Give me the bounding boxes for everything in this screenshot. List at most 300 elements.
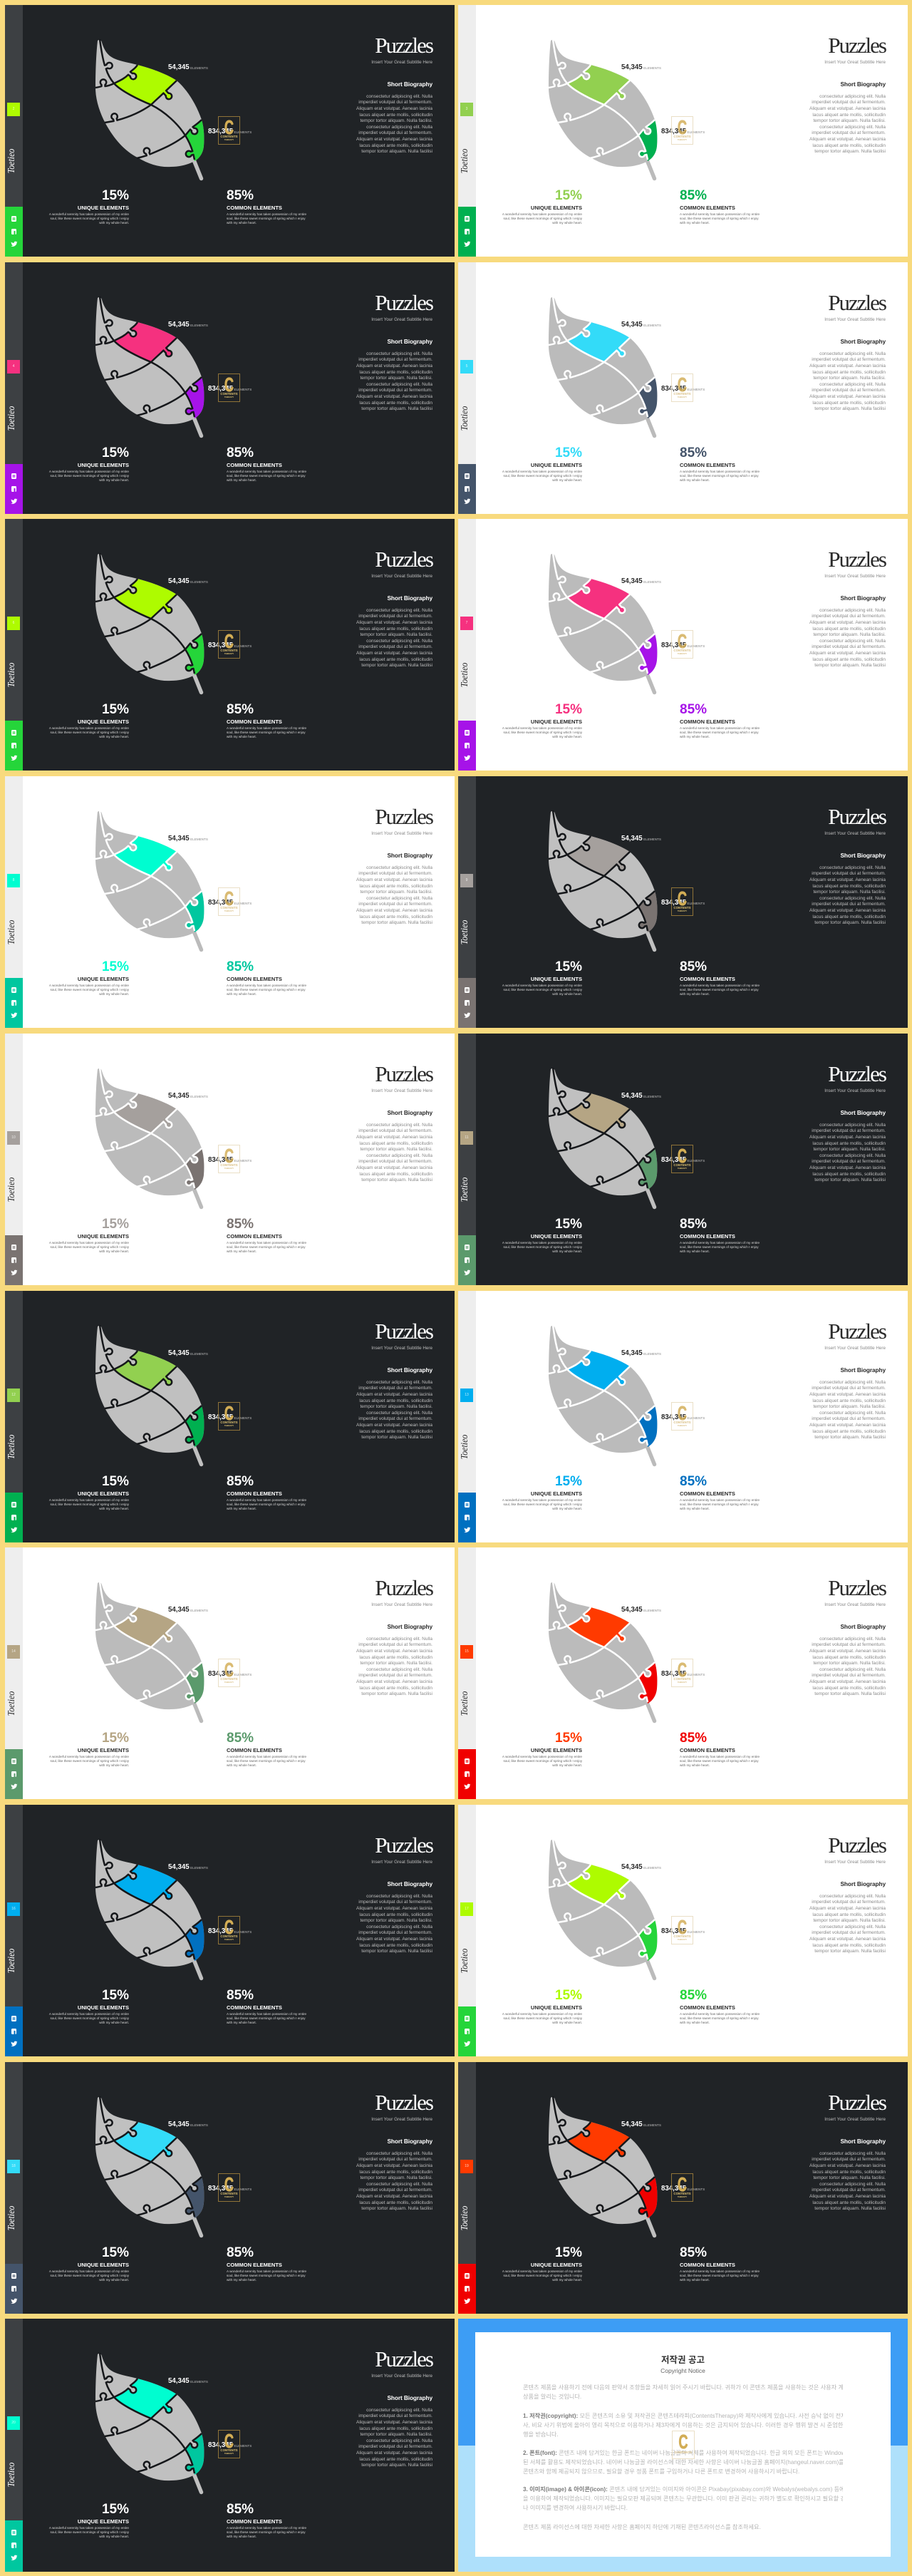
watermark logo: THERAPY <box>678 910 687 912</box>
stat text <box>227 984 306 997</box>
watermark logo: THERAPY <box>678 1167 687 1170</box>
stat text <box>502 1755 582 1768</box>
biography: Aliquam erat volutpat. Aenean lacinia <box>356 1135 432 1140</box>
stat text <box>502 470 582 482</box>
stat text: A wonderful serenity has taken possession of my entire <box>49 2270 129 2273</box>
biography: Aliquam erat volutpat. Aenean lacinia <box>809 137 886 142</box>
stat text: with my whole heart. <box>99 735 129 738</box>
stat 85%: 85% <box>227 1731 254 1746</box>
biography: imperdiet volutpat dui at fermentum. <box>812 1673 886 1678</box>
biography: consectetur adipiscing elit. Nulla <box>819 896 886 901</box>
biography: Aliquam erat volutpat. Aenean lacinia <box>809 620 886 625</box>
stat 85%: 85% <box>227 188 254 203</box>
biography: consectetur adipiscing elit. Nulla <box>366 1925 432 1930</box>
watermark logo <box>218 2430 240 2458</box>
biography: Aliquam erat volutpat. Aenean lacinia <box>356 2194 432 2199</box>
biography: lacus aliquet ante mollis, sollicitudin <box>359 1141 432 1146</box>
biography: Aliquam erat volutpat. Aenean lacinia <box>809 106 886 111</box>
watermark logo: THERAPY <box>678 1424 687 1427</box>
stat text: A wonderful serenity has taken possession of my entire <box>227 726 306 730</box>
stat label: UNIQUE ELEMENTS <box>78 2004 129 2011</box>
stat text: soul, like these sweet mornings of spring which I enjoy <box>50 2016 129 2020</box>
watermark logo <box>218 1402 240 1431</box>
stat text: with my whole heart. <box>99 1250 129 1253</box>
stat 15%: 15% <box>102 2502 129 2517</box>
stat text: soul, like these sweet mornings of spring which I enjoy <box>227 731 306 734</box>
sidebar <box>5 5 23 257</box>
stat text: A wonderful serenity has taken possession of my entire <box>227 2012 306 2016</box>
biography: imperdiet volutpat dui at fermentum. <box>812 1416 886 1421</box>
panel: slide 3 light green <box>458 5 908 257</box>
biography: tempor tortor aliquam. Nulla facilisi. <box>360 890 432 895</box>
watermark logo: C <box>678 116 687 138</box>
social icons <box>5 464 23 514</box>
brand: Toetieo <box>460 1949 470 1973</box>
subtitle: Insert Your Great Subtitle Here <box>371 2374 432 2379</box>
stat text <box>227 2526 306 2540</box>
stat label: COMMON ELEMENTS <box>227 2262 282 2268</box>
subtitle: Insert Your Great Subtitle Here <box>824 574 886 579</box>
biography: imperdiet volutpat dui at fermentum. <box>812 1930 886 1935</box>
biography: lacus aliquet ante mollis, sollicitudin <box>359 1429 432 1434</box>
heading: Short Biography <box>841 1623 886 1630</box>
sidebar <box>458 519 476 771</box>
brand: Toetieo <box>6 1949 17 1973</box>
sidebar <box>5 2062 23 2314</box>
page number <box>7 617 20 630</box>
page number <box>460 103 473 116</box>
stat text: with my whole heart. <box>680 992 710 996</box>
biography: Aliquam erat volutpat. Aenean lacinia <box>809 364 886 369</box>
watermark logo: THERAPY <box>224 2195 234 2198</box>
biography: lacus aliquet ante mollis, sollicitudin <box>359 2426 432 2431</box>
biography: tempor tortor aliquam. Nulla facilisi. <box>360 1918 432 1923</box>
title: Puzzles <box>375 33 432 58</box>
biography: Aliquam erat volutpat. Aenean lacinia <box>356 1679 432 1684</box>
stat text <box>48 726 129 738</box>
stat text <box>49 2270 129 2283</box>
biography: consectetur adipiscing elit. Nulla <box>366 639 432 644</box>
stat text: A wonderful serenity has taken possession of my entire <box>49 1241 129 1245</box>
biography: imperdiet volutpat dui at fermentum. <box>358 1128 432 1133</box>
page number: 5 <box>466 364 467 369</box>
biography <box>809 2151 886 2212</box>
sidebar <box>458 1547 476 1799</box>
stat text: A wonderful serenity has taken possession of my entire <box>680 212 760 216</box>
brand: Toetieo <box>460 406 470 431</box>
biography: imperdiet volutpat dui at fermentum. <box>812 100 886 105</box>
sidebar <box>458 776 476 1028</box>
page number: 19 <box>465 2164 469 2168</box>
stat text: with my whole heart. <box>552 1763 582 1767</box>
biography: Aliquam erat volutpat. Aenean lacinia <box>356 1649 432 1654</box>
biography: lacus aliquet ante mollis, sollicitudin <box>359 915 432 919</box>
biography: imperdiet volutpat dui at fermentum. <box>812 644 886 649</box>
leaf puzzle <box>5 1805 455 2056</box>
panel: slide 19 dark red <box>458 2062 908 2314</box>
heading: Short Biography <box>388 852 432 859</box>
biography: tempor tortor aliquam. Nulla facilisi <box>814 1949 886 1954</box>
biography: tempor tortor aliquam. Nulla facilisi <box>814 920 886 925</box>
watermark logo: C <box>224 1659 234 1681</box>
stat text: A wonderful serenity has taken possession of my entire <box>680 470 760 473</box>
watermark logo: THERAPY <box>224 138 234 141</box>
biography <box>356 1123 432 1184</box>
biography: consectetur adipiscing elit. Nulla <box>819 94 886 99</box>
stat text: with my whole heart. <box>680 1507 710 1510</box>
stat 15%: 15% <box>555 1217 582 1232</box>
stat text <box>502 984 582 997</box>
value 1: 54,345 ELEMENTS <box>621 1349 661 1357</box>
page number: 10 <box>11 1135 16 1140</box>
biography: consectetur adipiscing elit. Nulla <box>819 1667 886 1672</box>
stat 15%: 15% <box>102 959 129 974</box>
stat 85%: 85% <box>227 445 254 460</box>
stat text: soul, like these sweet mornings of spring which I enjoy <box>503 2016 582 2020</box>
watermark logo: THERAPY <box>224 2452 234 2455</box>
biography <box>809 94 886 154</box>
biography: Aliquam erat volutpat. Aenean lacinia <box>809 651 886 656</box>
brand: Toetieo <box>460 920 470 944</box>
biography: tempor tortor aliquam. Nulla facilisi. <box>813 2175 886 2180</box>
title: Puzzles <box>828 547 886 572</box>
biography: lacus aliquet ante mollis, sollicitudin <box>359 1943 432 1948</box>
stat text: with my whole heart. <box>227 2278 256 2282</box>
value 1: 54,345 ELEMENTS <box>168 63 208 71</box>
value 2: 834,345 ELEMENTS <box>661 2185 705 2193</box>
biography: imperdiet volutpat dui at fermentum. <box>358 614 432 619</box>
watermark logo: C <box>224 373 234 396</box>
value 1: 54,345 ELEMENTS <box>168 2121 208 2128</box>
watermark logo: CONTENTS <box>673 1163 691 1167</box>
stat text: with my whole heart. <box>227 1250 256 1253</box>
stat text: A wonderful serenity has taken possession of my entire <box>502 1755 582 1758</box>
biography: consectetur adipiscing elit. Nulla <box>819 2182 886 2187</box>
biography: Aliquam erat volutpat. Aenean lacinia <box>356 620 432 625</box>
biography: Aliquam erat volutpat. Aenean lacinia <box>356 2451 432 2456</box>
stat label: COMMON ELEMENTS <box>227 718 282 725</box>
heading: Short Biography <box>841 1366 886 1374</box>
biography: lacus aliquet ante mollis, sollicitudin <box>812 113 886 118</box>
watermark logo <box>671 630 693 659</box>
biography: Aliquam erat volutpat. Aenean lacinia <box>809 1679 886 1684</box>
stat text: soul, like these sweet mornings of spring which I enjoy <box>503 217 582 220</box>
stat text: with my whole heart. <box>99 992 129 996</box>
watermark logo <box>671 1145 693 1173</box>
leaf puzzle <box>95 39 204 181</box>
biography: Aliquam erat volutpat. Aenean lacinia <box>356 2163 432 2168</box>
brand: Toetieo <box>6 663 17 687</box>
watermark logo: CONTENTS <box>220 649 238 652</box>
subtitle: Insert Your Great Subtitle Here <box>371 574 432 579</box>
value 2: 834,345 ELEMENTS <box>208 1413 252 1421</box>
stat 15%: 15% <box>555 445 582 460</box>
biography: tempor tortor aliquam. Nulla facilisi <box>361 663 432 668</box>
panel: slide 7 light pink <box>458 519 908 771</box>
stat text: A wonderful serenity has taken possession of my entire <box>227 2270 306 2273</box>
heading: Short Biography <box>388 1109 432 1116</box>
biography: Aliquam erat volutpat. Aenean lacinia <box>809 2194 886 2199</box>
white card <box>475 2332 891 2557</box>
stat text: soul, like these sweet mornings of spring which I enjoy <box>50 1245 129 1249</box>
biography: consectetur adipiscing elit. Nulla <box>819 1637 886 1642</box>
social icons <box>458 1235 476 1285</box>
stat text <box>49 1498 129 1512</box>
watermark logo: THERAPY <box>678 2195 687 2198</box>
title: Puzzles <box>375 804 432 829</box>
stat text <box>502 2012 582 2026</box>
social icons <box>5 2264 23 2314</box>
watermark logo: C <box>224 1402 234 1424</box>
page number: 12 <box>11 1393 16 1397</box>
biography: Aliquam erat volutpat. Aenean lacinia <box>356 2420 432 2425</box>
heading: Short Biography <box>388 594 432 602</box>
stat text: A wonderful serenity has taken possession of my entire <box>49 2526 129 2530</box>
stat label: COMMON ELEMENTS <box>227 462 282 468</box>
watermark logo: C <box>224 2173 234 2195</box>
panel: slide 13 light blue <box>458 1291 908 1542</box>
sidebar <box>5 519 23 771</box>
stat label: UNIQUE ELEMENTS <box>531 1490 582 1497</box>
stat 15%: 15% <box>102 188 129 203</box>
page number: 18 <box>11 2164 16 2168</box>
stat text: soul, like these sweet mornings of spring which I enjoy <box>227 1245 306 1249</box>
stat text <box>49 1241 129 1254</box>
stat label: COMMON ELEMENTS <box>680 2004 735 2011</box>
watermark logo: C <box>678 1145 687 1167</box>
stat text: soul, like these sweet mornings of spring which I enjoy <box>680 988 759 991</box>
page number: 14 <box>11 1649 16 1654</box>
social icons <box>458 464 476 514</box>
value 2: 834,345 ELEMENTS <box>208 642 252 649</box>
biography: consectetur adipiscing elit. Nulla <box>366 2182 432 2187</box>
stat text: A wonderful serenity has taken possession of my entire <box>227 1755 306 1758</box>
brand: Toetieo <box>6 2463 17 2487</box>
stat text <box>680 470 760 482</box>
stat label: UNIQUE ELEMENTS <box>78 1747 129 1753</box>
biography: lacus aliquet ante mollis, sollicitudin <box>359 113 432 118</box>
biography: imperdiet volutpat dui at fermentum. <box>358 1900 432 1905</box>
watermark logo: C <box>224 1145 234 1167</box>
stat 85%: 85% <box>227 1988 254 2003</box>
page number <box>460 874 473 887</box>
biography: tempor tortor aliquam. Nulla facilisi. <box>813 890 886 895</box>
watermark logo <box>218 373 240 402</box>
value 1: 54,345 ELEMENTS <box>621 1606 661 1614</box>
stat label: UNIQUE ELEMENTS <box>531 462 582 468</box>
sidebar <box>458 2062 476 2314</box>
stat 85%: 85% <box>227 959 254 974</box>
biography: imperdiet volutpat dui at fermentum. <box>812 614 886 619</box>
watermark logo: CONTENTS <box>673 906 691 910</box>
biography: consectetur adipiscing elit. Nulla <box>366 1380 432 1385</box>
stat text: with my whole heart. <box>227 992 256 996</box>
biography <box>809 1637 886 1698</box>
stat text: with my whole heart. <box>99 2535 129 2538</box>
stat label: UNIQUE ELEMENTS <box>531 205 582 211</box>
stat text <box>227 470 306 482</box>
social icons <box>458 721 476 771</box>
stat label: UNIQUE ELEMENTS <box>531 2262 582 2268</box>
watermark logo: CONTENTS <box>673 392 691 396</box>
biography: tempor tortor aliquam. Nulla facilisi <box>814 1435 886 1440</box>
stat text <box>49 2526 129 2540</box>
biography: tempor tortor aliquam. Nulla facilisi. <box>360 2432 432 2437</box>
intro text: 상품을 알리는 것입니다. <box>523 2394 581 2400</box>
biography <box>356 351 432 411</box>
panel: slide 2 dark lime <box>5 5 455 257</box>
biography <box>809 1123 886 1184</box>
biography <box>356 94 432 154</box>
social icons <box>458 1749 476 1799</box>
sidebar <box>5 1291 23 1542</box>
value 2: 834,345 ELEMENTS <box>208 899 252 907</box>
page number <box>460 1131 473 1145</box>
stat label: COMMON ELEMENTS <box>680 462 735 468</box>
biography: lacus aliquet ante mollis, sollicitudin <box>812 1686 886 1691</box>
biography: consectetur adipiscing elit. Nulla <box>819 1411 886 1416</box>
biography: tempor tortor aliquam. Nulla facilisi. <box>360 118 432 123</box>
stat 85%: 85% <box>227 2502 254 2517</box>
biography: lacus aliquet ante mollis, sollicitudin <box>812 915 886 919</box>
biography: tempor tortor aliquam. Nulla facilisi. <box>813 376 886 381</box>
stat text: soul, like these sweet mornings of spring which I enjoy <box>680 731 759 734</box>
biography: tempor tortor aliquam. Nulla facilisi <box>361 2206 432 2211</box>
watermark logo: THERAPY <box>678 1938 687 1941</box>
subtitle: Insert Your Great Subtitle Here <box>824 1088 886 1093</box>
stat text <box>227 1755 306 1768</box>
subtitle: Insert Your Great Subtitle Here <box>824 60 886 65</box>
watermark logo <box>671 116 693 145</box>
watermark logo: THERAPY <box>224 1424 234 1427</box>
biography: imperdiet volutpat dui at fermentum. <box>812 1128 886 1133</box>
stat label: UNIQUE ELEMENTS <box>78 2262 129 2268</box>
watermark logo: THERAPY <box>224 910 234 912</box>
watermark logo <box>671 1916 693 1944</box>
watermark logo <box>671 373 693 402</box>
subtitle: Insert Your Great Subtitle Here <box>824 317 886 322</box>
title: Puzzles <box>375 1575 432 1600</box>
clause 1: 행을 받습니다. <box>523 2431 559 2438</box>
panel: slide 4 dark pink <box>5 262 455 514</box>
watermark logo <box>218 116 240 145</box>
biography: Aliquam erat volutpat. Aenean lacinia <box>356 394 432 399</box>
biography: imperdiet volutpat dui at fermentum. <box>812 2157 886 2162</box>
leaf puzzle <box>549 40 657 181</box>
biography: imperdiet volutpat dui at fermentum. <box>358 1642 432 1647</box>
leaf puzzle <box>458 1805 908 2056</box>
social icons <box>458 2264 476 2314</box>
biography: imperdiet volutpat dui at fermentum. <box>358 644 432 649</box>
stat text: soul, like these sweet mornings of spring which I enjoy <box>503 2274 582 2277</box>
biography: consectetur adipiscing elit. Nulla <box>819 1894 886 1899</box>
sidebar <box>5 1547 23 1799</box>
watermark logo: CONTENTS <box>220 1934 238 1938</box>
biography: tempor tortor aliquam. Nulla facilisi. <box>813 118 886 123</box>
biography: imperdiet volutpat dui at fermentum. <box>358 100 432 105</box>
value 1: 54,345 ELEMENTS <box>168 1092 208 1100</box>
stat text: soul, like these sweet mornings of spring which I enjoy <box>680 1245 759 1249</box>
leaf puzzle <box>458 1034 908 1285</box>
sidebar <box>458 262 476 514</box>
stat text: A wonderful serenity has taken possession of my entire <box>502 470 582 473</box>
stat text: with my whole heart. <box>552 221 582 225</box>
heading: Short Biography <box>388 2394 432 2401</box>
stat text <box>502 1241 582 1254</box>
leaf puzzle <box>549 554 657 694</box>
stat label: COMMON ELEMENTS <box>680 2262 735 2268</box>
watermark logo: THERAPY <box>224 1938 234 1941</box>
biography: imperdiet volutpat dui at fermentum. <box>358 2157 432 2162</box>
biography: consectetur adipiscing elit. Nulla <box>366 1123 432 1128</box>
biography: lacus aliquet ante mollis, sollicitudin <box>812 1141 886 1146</box>
page number <box>7 874 20 887</box>
value 2: 834,345 ELEMENTS <box>208 2185 252 2193</box>
biography: Aliquam erat volutpat. Aenean lacinia <box>356 1392 432 1397</box>
watermark logo: C <box>678 2431 688 2453</box>
title: Puzzles <box>375 290 432 315</box>
stat text <box>502 1498 582 1512</box>
watermark logo: CONTENTS <box>220 392 238 396</box>
social icons <box>458 2006 476 2056</box>
biography: imperdiet volutpat dui at fermentum. <box>358 902 432 907</box>
panel: slide 17 light lime <box>458 1805 908 2056</box>
stat text: soul, like these sweet mornings of spring which I enjoy <box>227 474 306 478</box>
stat label: UNIQUE ELEMENTS <box>78 462 129 468</box>
leaf puzzle <box>5 1547 455 1799</box>
biography: imperdiet volutpat dui at fermentum. <box>358 2413 432 2418</box>
biography: lacus aliquet ante mollis, sollicitudin <box>812 1398 886 1403</box>
stat 15%: 15% <box>102 702 129 717</box>
stat text: with my whole heart. <box>552 1250 582 1253</box>
value 2: 834,345 ELEMENTS <box>208 2441 252 2449</box>
page number <box>460 1645 473 1659</box>
watermark logo: C <box>678 1402 687 1424</box>
value 1: 54,345 ELEMENTS <box>168 577 208 585</box>
stat label: COMMON ELEMENTS <box>680 976 735 982</box>
biography: Aliquam erat volutpat. Aenean lacinia <box>356 1423 432 1428</box>
value 2: 834,345 ELEMENTS <box>208 385 252 393</box>
biography: tempor tortor aliquam. Nulla facilisi <box>361 1435 432 1440</box>
biography: lacus aliquet ante mollis, sollicitudin <box>812 2200 886 2205</box>
biography: lacus aliquet ante mollis, sollicitudin <box>812 1655 886 1660</box>
biography: consectetur adipiscing elit. Nulla <box>366 896 432 901</box>
stat text: soul, like these sweet mornings of spring which I enjoy <box>50 1759 129 1763</box>
social icons <box>458 207 476 257</box>
sidebar <box>5 262 23 514</box>
biography: Aliquam erat volutpat. Aenean lacinia <box>809 908 886 913</box>
watermark logo <box>671 887 693 916</box>
biography: lacus aliquet ante mollis, sollicitudin <box>812 1912 886 1917</box>
stat text: with my whole heart. <box>227 2021 256 2024</box>
stat text: with my whole heart. <box>227 735 256 738</box>
sidebar <box>5 1805 23 2056</box>
biography: imperdiet volutpat dui at fermentum. <box>812 1900 886 1905</box>
page number: 8 <box>13 878 14 882</box>
biography <box>356 1380 432 1441</box>
stat label: COMMON ELEMENTS <box>680 1233 735 1240</box>
biography: tempor tortor aliquam. Nulla facilisi <box>361 920 432 925</box>
title: Puzzles <box>828 1833 886 1858</box>
subtitle: Insert Your Great Subtitle Here <box>824 831 886 836</box>
social icons <box>5 2006 23 2056</box>
stat text: soul, like these sweet mornings of spring which I enjoy <box>680 2016 759 2020</box>
biography <box>356 608 432 668</box>
stat 85%: 85% <box>227 1217 254 1232</box>
watermark logo: C <box>678 2173 687 2195</box>
biography: consectetur adipiscing elit. Nulla <box>366 1153 432 1158</box>
biography: imperdiet volutpat dui at fermentum. <box>358 2188 432 2193</box>
